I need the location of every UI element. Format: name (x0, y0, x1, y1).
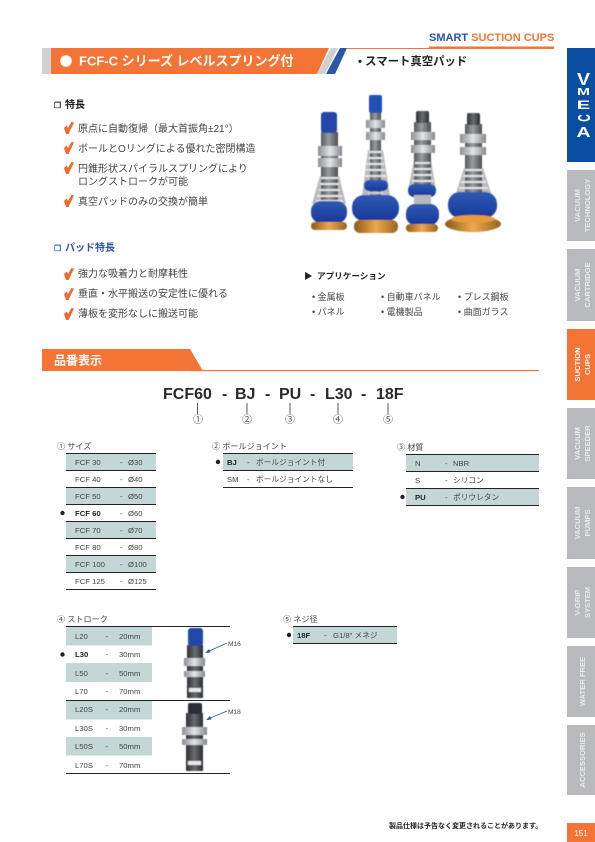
table 2: ball joint: ② ボールジョイント (212, 442, 287, 451)
page number (567, 823, 595, 842)
table 2: ball joint: - (247, 458, 250, 467)
tab: VMECA logo (567, 48, 595, 162)
part number code (163, 386, 404, 426)
page number: 151 (574, 829, 588, 838)
table 3: material: - (445, 459, 448, 468)
table 3: material: N (415, 459, 421, 468)
thread illustration: M16 (184, 628, 205, 698)
table 1: size: Ø125 (128, 577, 147, 586)
pad features heading: ❐ (54, 244, 61, 253)
tab: accessories: ACCESSORIES (578, 732, 587, 788)
pad feature 1: 強力な吸着力と耐摩耗性 (78, 267, 188, 280)
table 1: size: FCF 125 (75, 577, 105, 586)
table 1: size: - (120, 509, 123, 518)
tab: VMECA logo: E (577, 98, 590, 112)
applications list: • 自動車パネル (381, 291, 441, 302)
table 4: stroke: 20mm (119, 705, 140, 714)
table 3: material: ポリウレタン (453, 493, 499, 502)
applications list (312, 291, 509, 317)
footer note: 製品仕様は予告なく変更されることがあります。 (389, 821, 542, 830)
table 4: stroke: - (106, 650, 108, 659)
part number code: ④ (333, 414, 343, 426)
table 1: size: Ø40 (128, 475, 143, 484)
table 3: material (397, 442, 539, 506)
title banner (42, 48, 347, 74)
table 3: material: ③ 材質 (397, 442, 424, 452)
table 4: stroke: - (106, 761, 108, 770)
table 3: material: - (445, 493, 448, 502)
tab: vacuum technology: TECHNOLOGY (583, 179, 592, 232)
tab: v-grip system: V-GRIP (573, 590, 582, 615)
cup 3 (406, 111, 439, 232)
tab: vacuum pumps (567, 487, 595, 559)
tab: VMECA logo: A (576, 123, 591, 140)
callout: M16 (205, 641, 241, 653)
table 4: stroke: - (106, 742, 108, 751)
table 5: thread size: ⑤ ネジ径 (283, 614, 318, 624)
part number code: - (265, 386, 270, 403)
table 1: size: FCF 80 (75, 543, 101, 552)
table 4: stroke: L70S (75, 761, 93, 770)
feature list (64, 122, 255, 208)
table 1: size: - (120, 543, 123, 552)
part number code: ① (193, 414, 203, 426)
part number code: - (310, 386, 315, 403)
part number code: - (361, 386, 366, 403)
feature 4: 真空パッドのみの交換が簡単 (78, 195, 208, 208)
pad features heading: パッド特長 (65, 241, 115, 254)
feature 3: ロングストロークが可能 (78, 175, 188, 188)
tab: suction cups active: SUCTION (573, 347, 582, 382)
tab: vacuum technology: VACUUM (573, 189, 582, 222)
feature 3 (64, 162, 248, 188)
tab: VMECA logo: V (577, 69, 591, 89)
tab: accessories (567, 725, 595, 795)
tab: VMECA logo: C (575, 114, 595, 122)
feature 2: ボールとOリングによる優れた密閉構造 (78, 142, 255, 155)
feature 3: 円錐形状スパイラルスプリングにより (78, 162, 248, 175)
table 1: size: FCF 50 (75, 492, 101, 501)
part number code: ② (242, 414, 252, 426)
applications list: • パネル (312, 307, 345, 317)
table 1: size: - (120, 560, 123, 569)
part number code: 18F (376, 386, 404, 403)
table 3: material: PU (415, 493, 426, 502)
tab: v-grip system: SYSTEM (583, 587, 592, 618)
table 4: stroke: 20mm (119, 632, 140, 641)
part number code: ③ (285, 414, 295, 426)
title banner: FCF-C シリーズ レベルスプリング付 (79, 54, 294, 68)
table 4: stroke: L20S (75, 705, 93, 714)
cup 1 (311, 112, 347, 230)
table 4: stroke: L50 (75, 669, 88, 678)
table 1: size: - (120, 526, 123, 535)
table 1: size: Ø70 (128, 526, 143, 535)
table 1: size: - (120, 475, 123, 484)
feature 1: 原点に自動復帰（最大首振角±21°） (78, 122, 239, 135)
thread illustration: M18 (182, 703, 207, 771)
table 4: stroke: L20 (75, 632, 88, 641)
applications panel (304, 271, 509, 317)
callout: M16: M16 (228, 641, 241, 648)
table 2: ball joint: - (247, 475, 250, 484)
table 4: stroke: 70mm (119, 687, 140, 696)
part number code: PU (279, 386, 301, 403)
subtitle: • スマート真空パッド (358, 54, 467, 68)
table 1: size: FCF 40 (75, 475, 101, 484)
callout: M18 (206, 709, 241, 720)
table 4: stroke: 30mm (119, 650, 140, 659)
table 5: thread size (283, 614, 397, 644)
table 1: size: Ø80 (128, 543, 143, 552)
tab: vacuum pumps: VACUUM (573, 507, 582, 539)
table 1: size: FCF 100 (75, 560, 105, 569)
cup 2 (352, 95, 399, 233)
table 1: size: - (120, 458, 123, 467)
table 4: stroke: - (106, 669, 108, 678)
table 5: thread size: 18F (297, 631, 311, 640)
table 1: size: Ø30 (128, 458, 143, 467)
pad features heading (54, 241, 115, 254)
table 3: material: - (445, 476, 448, 485)
table 1: size (57, 441, 156, 590)
table 4: stroke: L30S (75, 724, 93, 733)
features heading (54, 98, 85, 111)
table 1: size: Ø50 (128, 492, 143, 501)
table 3: material: NBR (453, 459, 470, 468)
tab: vacuum technology (567, 170, 595, 241)
pad feature 2: 垂直・水平搬送の安定性に優れる (78, 287, 228, 300)
pad feature 3: 薄板を変形なしに搬送可能 (78, 307, 198, 320)
tab: VMECA logo: M (577, 86, 590, 97)
tab: vacuum cartridge: VACUUM (573, 269, 582, 301)
part number section heading (42, 349, 539, 371)
table 4: stroke: 30mm (119, 724, 140, 733)
tab: vacuum speeder: VACUUM (573, 427, 582, 460)
tab: vacuum cartridge: CARTRIDGE (583, 262, 592, 308)
tab: suction cups active: CUPS (583, 354, 592, 375)
table 4: stroke: - (106, 687, 108, 696)
table 1: size: ① サイズ (57, 441, 91, 451)
table 1: size: - (120, 577, 123, 586)
table 1: size: Ø100 (128, 560, 147, 569)
table 4: stroke: 50mm (119, 669, 140, 678)
features heading: ❐ (54, 101, 61, 110)
brand heading: smart suction cups: SMART SUCTION CUPS (429, 32, 554, 44)
part number section heading: 品番表示 (54, 352, 102, 368)
table 2: ball joint: BJ (227, 458, 237, 467)
table 4: stroke: ④ ストローク (57, 615, 108, 624)
cup 4 (445, 113, 501, 232)
table 4: stroke: - (106, 724, 108, 733)
tab: vacuum speeder (567, 408, 595, 479)
applications list: • 金属板 (312, 291, 345, 302)
pad feature list (64, 267, 228, 320)
tab: water free: WATER FREE (578, 657, 587, 706)
applications heading: ▶ アプリケーション (304, 271, 386, 281)
features heading: 特長 (65, 98, 85, 111)
tab: vacuum cartridge (567, 249, 595, 321)
tab: suction cups active (567, 329, 595, 400)
table 1: size: FCF 70 (75, 526, 101, 535)
tab: v-grip system (567, 567, 595, 638)
table 1: size: Ø60 (128, 509, 143, 518)
applications list: • 曲面ガラス (458, 307, 508, 317)
table 4: stroke: L70 (75, 687, 88, 696)
table 4: stroke: 50mm (119, 742, 140, 751)
applications list: • 電機製品 (381, 306, 423, 317)
table 2: ball joint (212, 442, 353, 488)
product photo: four suction cups (311, 95, 501, 233)
table 1: size: FCF 60 (75, 509, 101, 518)
applications list: • プレス鋼板 (458, 291, 509, 302)
table 5: thread size: G1/8" メネジ (333, 631, 378, 640)
table 3: material: シリコン (453, 476, 484, 485)
table 4: stroke: 70mm (119, 761, 140, 770)
table 4: stroke: - (106, 632, 108, 641)
part number code: ⑤ (383, 414, 393, 426)
table 1: size: FCF 30 (75, 458, 101, 467)
table 3: material: S (415, 476, 420, 485)
table 4: stroke: L50S (75, 742, 93, 751)
callout: M18: M18 (228, 709, 241, 716)
part number code: L30 (325, 386, 353, 403)
table 2: ball joint: ボールジョイントなし (256, 475, 333, 484)
table 5: thread size: - (324, 631, 327, 640)
tab: vacuum speeder: SPEEDER (583, 425, 592, 462)
part number code: FCF60 (163, 386, 212, 403)
part number code: BJ (235, 386, 255, 403)
sidebar navigation (567, 48, 595, 842)
table 2: ball joint: SM (227, 475, 239, 484)
table 4: stroke: - (106, 705, 108, 714)
tab: water free (567, 646, 595, 717)
table 2: ball joint: ボールジョイント付 (256, 457, 326, 467)
tab: vacuum pumps: PUMPS (583, 509, 592, 537)
table 4: stroke: L30 (75, 650, 88, 659)
table 4: stroke (57, 615, 230, 774)
table 1: size: - (120, 492, 123, 501)
part number code: - (222, 386, 227, 403)
